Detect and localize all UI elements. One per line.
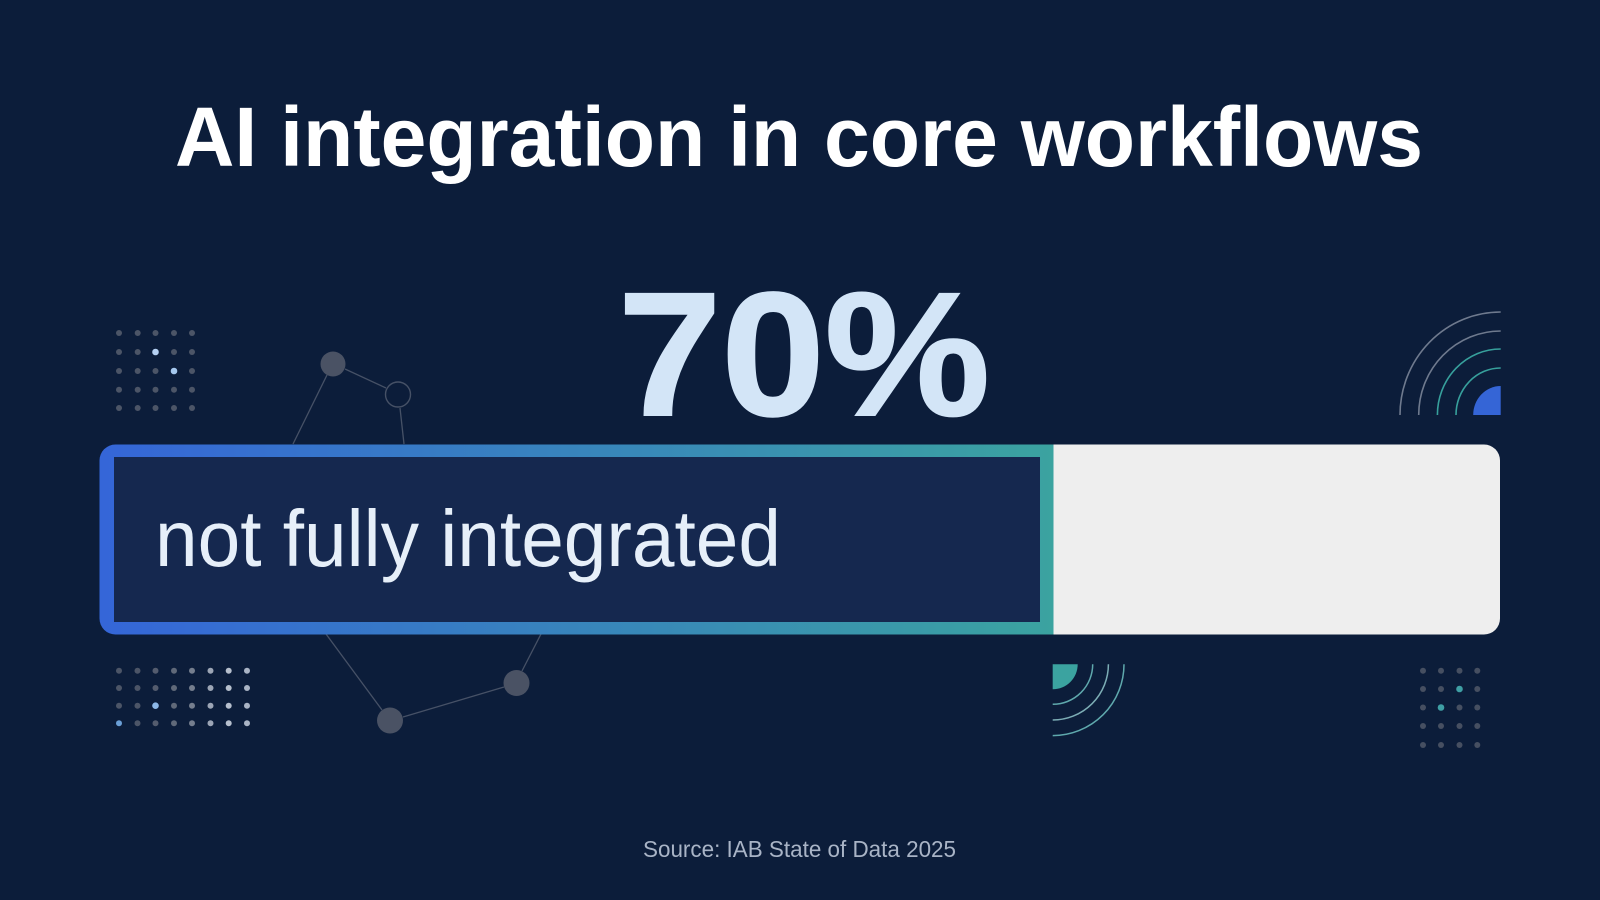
title: AI integration in core workflows (175, 90, 1423, 184)
network node (320, 352, 346, 376)
dot grid: bottom left (116, 668, 250, 726)
bar remainder: light segment (1053, 444, 1500, 634)
network graphic (293, 352, 541, 734)
dot grid: bottom right (1420, 668, 1480, 748)
network node (377, 708, 403, 734)
big stat: 70%: 70% (618, 257, 990, 453)
icon: concentric arcs top right (1400, 312, 1501, 415)
bar filled segment: gradient border (100, 444, 1054, 634)
dot grid: top left (116, 330, 195, 411)
source: Source: IAB State of Data 2025 (643, 836, 956, 862)
network node (504, 670, 530, 696)
network node hollow (386, 382, 410, 407)
bar filled segment: dark inner (114, 457, 1040, 622)
icon: concentric arcs bottom centre (1053, 664, 1124, 736)
bar label: not fully integrated (155, 494, 781, 583)
progress bar (100, 444, 1500, 634)
